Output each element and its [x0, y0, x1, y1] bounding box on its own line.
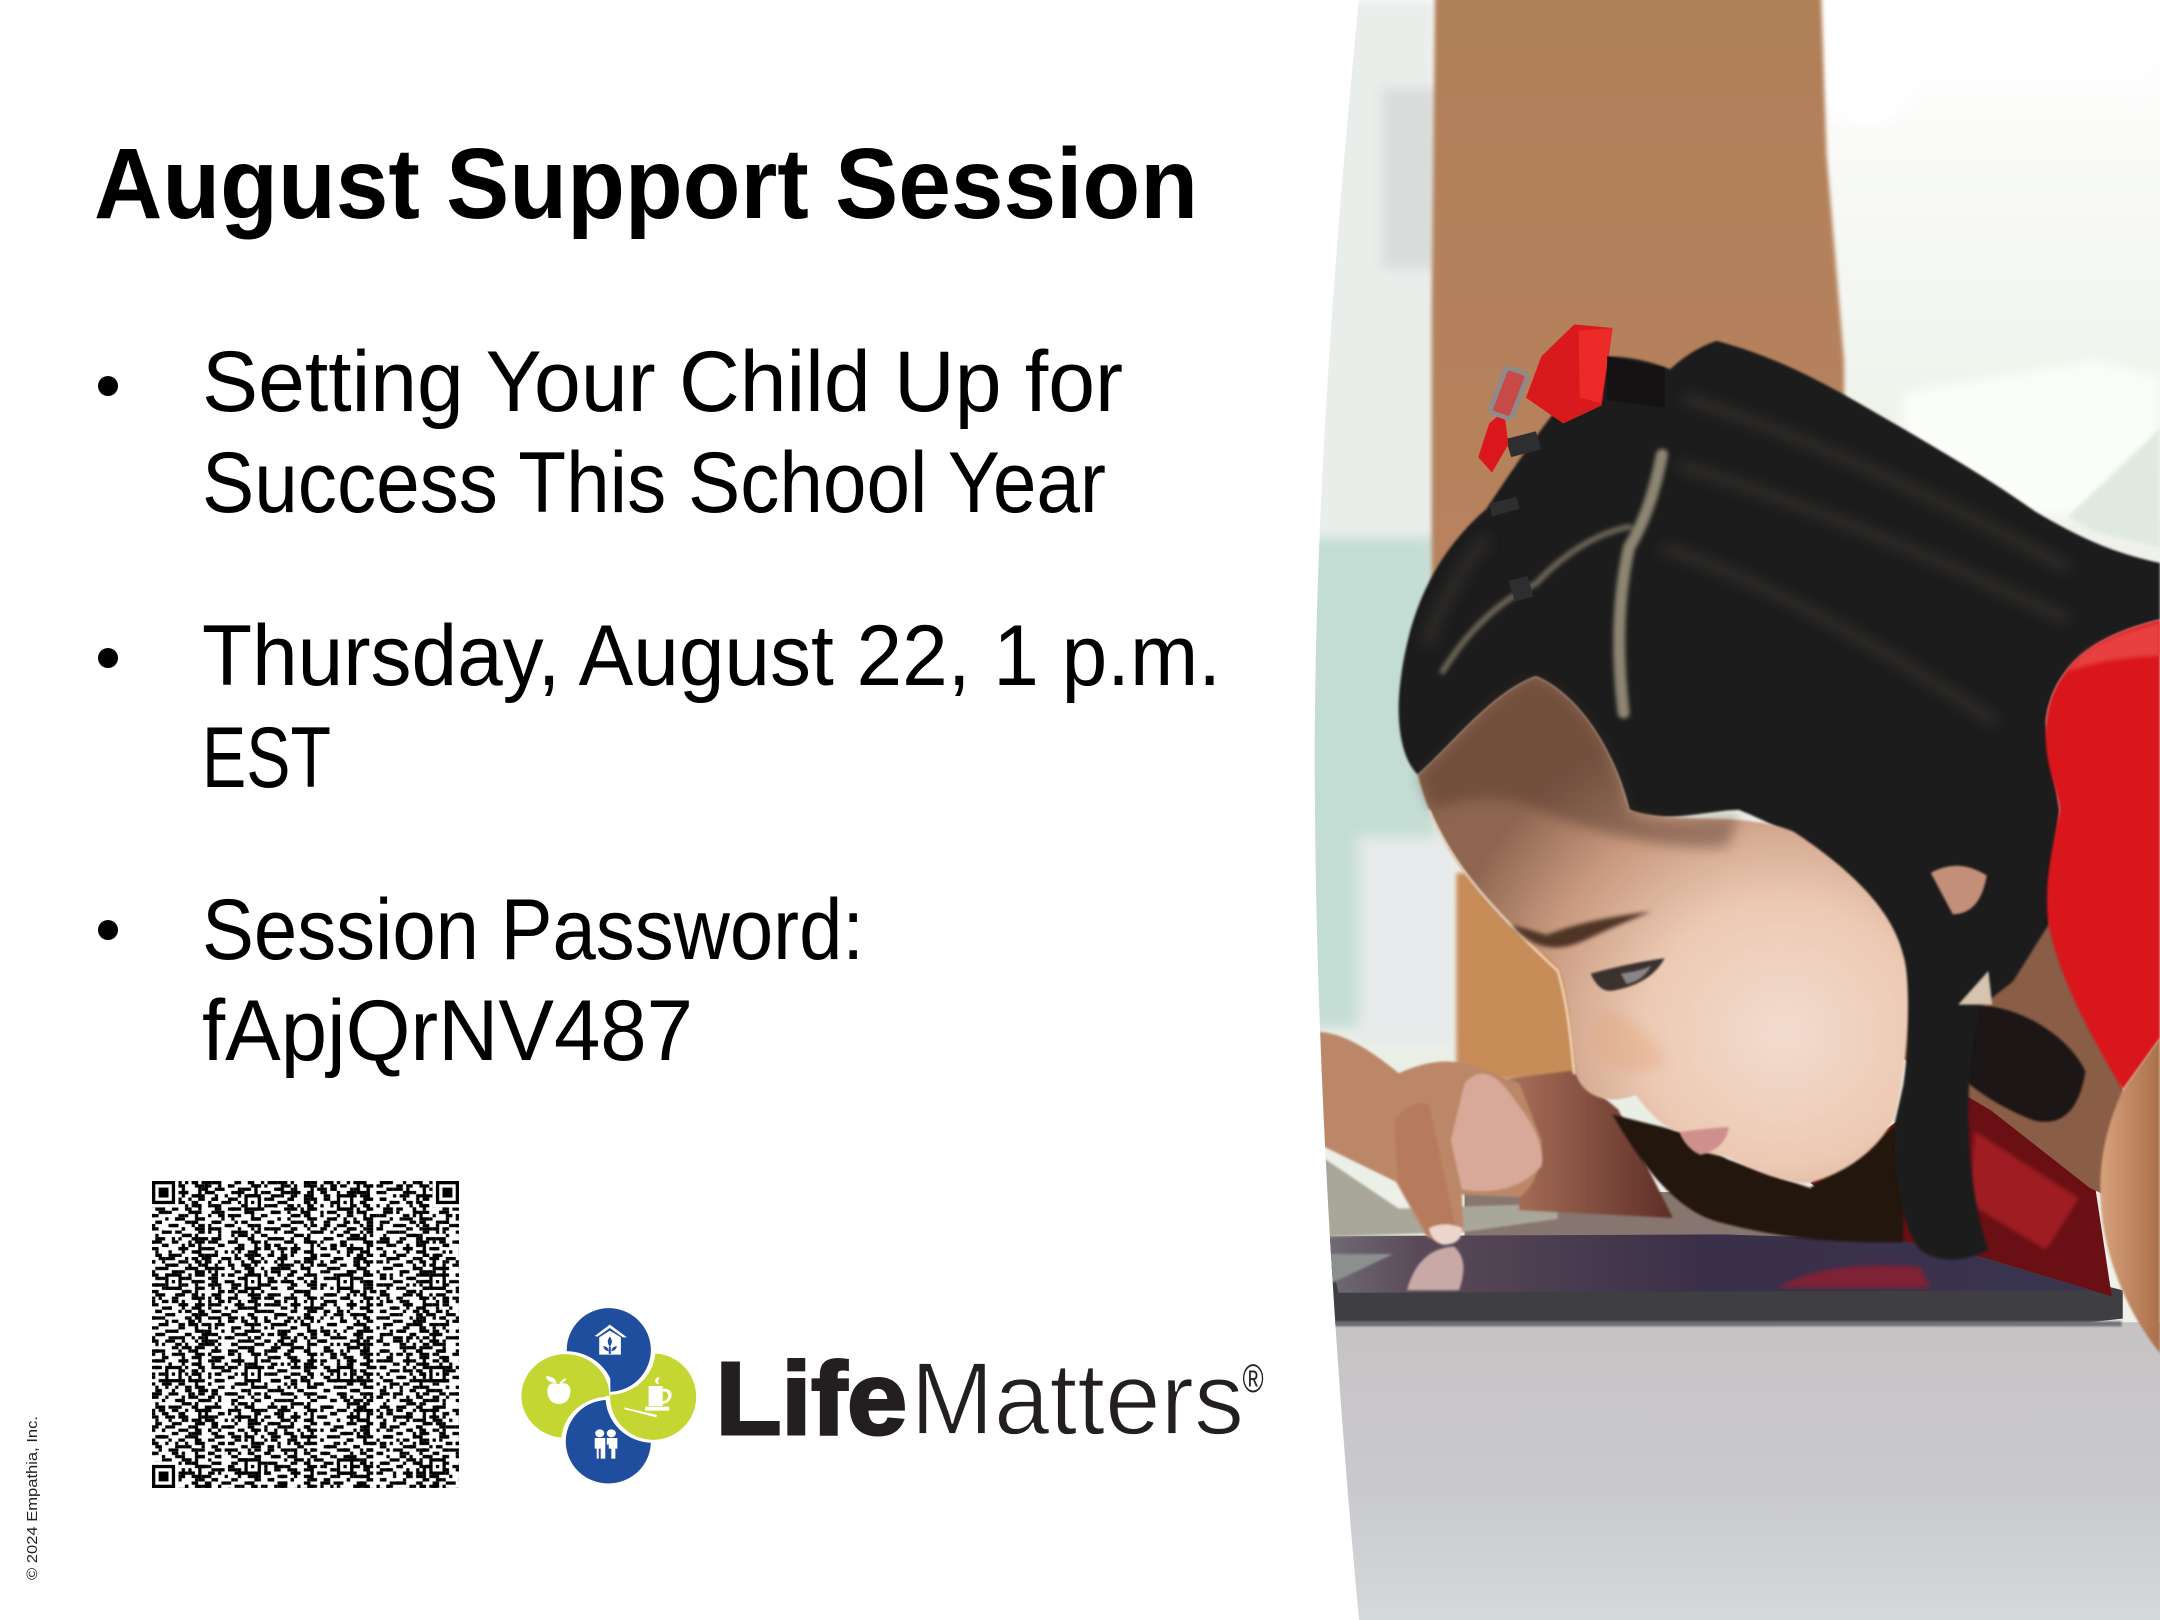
QR code: [152, 1181, 459, 1488]
tablet: [1326, 1192, 2123, 1326]
slide: ®: [1242, 1356, 1264, 1401]
bullet 1: session topic: Setting Your Child Up for: [202, 334, 1123, 430]
bullet list: [98, 334, 1221, 1079]
icon: parent and child: [595, 1429, 617, 1459]
right arm: [2100, 1038, 2160, 1353]
icon: house with plant: [595, 1325, 627, 1355]
ear: [1931, 866, 1987, 914]
hair sheen: [1426, 398, 2068, 723]
logo mark: interlocking leaves: [519, 1307, 698, 1485]
face rim light: [1429, 810, 1574, 1074]
eye: [1591, 958, 1665, 991]
nose shading: [1592, 1012, 1664, 1073]
bullet 2: date and time: [98, 608, 1221, 806]
neck highlight: [1958, 971, 1992, 1005]
shirt: [1810, 1085, 2112, 1296]
hair: [1399, 341, 2160, 1260]
back hair and hair under chin: [1613, 1115, 1903, 1242]
bullet 3: session password: Session Password:: [202, 882, 864, 978]
neck and shoulder: [1903, 909, 2128, 1198]
face: [1418, 677, 1908, 1183]
LifeMatters logo: [519, 1307, 1264, 1485]
title: August Support Session: [94, 128, 1198, 240]
lips: [1680, 1127, 1729, 1155]
hair bands: [1489, 431, 1541, 602]
bullet 3: session password: [98, 882, 864, 1079]
hair bow: [1478, 324, 1665, 473]
wordmark: [716, 1341, 1264, 1457]
eyebrow: [1511, 912, 1651, 948]
wordmark: Matters: [911, 1341, 1244, 1457]
bullet 1: session topic: Success This School Year: [202, 435, 1106, 531]
copyright: © 2024 Empathia, Inc.: [25, 1416, 41, 1580]
bullet 2: date and time: EST: [202, 710, 331, 806]
photo: girl looking closely at a tablet: [1300, 0, 2160, 1620]
bullet 2: date and time: Thursday, August 22, 1 p.m.: [202, 608, 1221, 704]
cloth under hand: [1322, 1157, 1558, 1237]
wordmark: Life: [716, 1341, 907, 1457]
forehead baby hair shading: [1418, 677, 1739, 848]
table surface: [1300, 1322, 2160, 1620]
bullet 1: session topic: [98, 334, 1123, 531]
red sleeve: [2046, 620, 2160, 1090]
photo background: blurred room: [1314, 0, 2160, 1322]
icon: apple: [546, 1376, 571, 1404]
icon: coffee mug and pencil: [624, 1377, 672, 1417]
forearm and hand: [1318, 1032, 1673, 1245]
hair parting lines: [1443, 455, 1662, 713]
bullet 3: session password: fApjQrNV487: [202, 983, 693, 1079]
